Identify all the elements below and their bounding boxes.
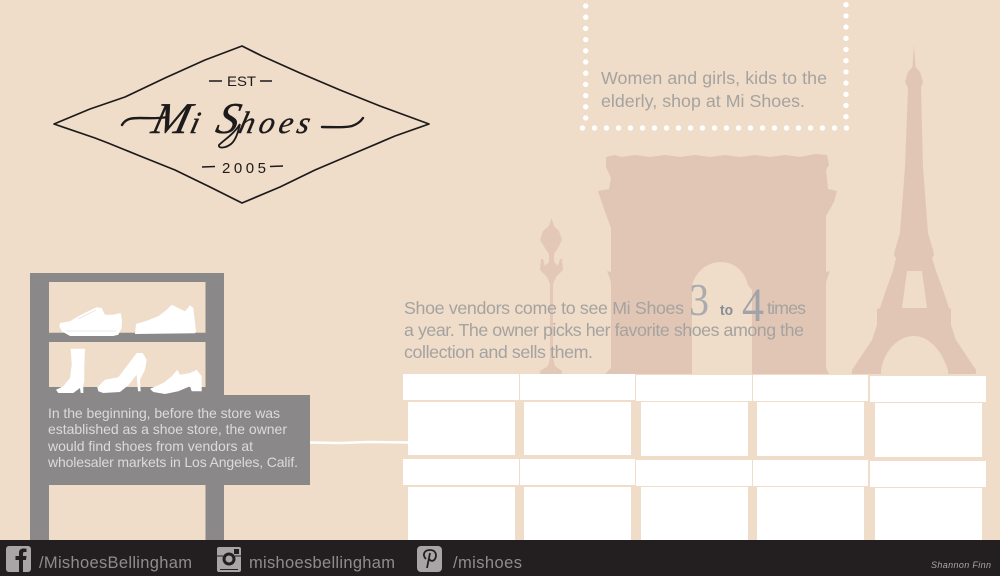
footer bar	[0, 540, 1000, 576]
big numbers: 3 to 4: 3	[689, 274, 709, 325]
silhouette: Eiffel Tower	[852, 45, 976, 374]
callout text: who shops: Women and girls, kids to the	[601, 68, 827, 88]
icon: pinterest	[417, 546, 442, 572]
credit: Shannon Finn	[931, 560, 991, 570]
silhouette: Arc de Triomphe	[598, 154, 837, 374]
icon: flat shoe	[135, 305, 196, 334]
callout text: who shops: elderly, shop at Mi Shoes.	[601, 91, 805, 111]
silhouette: street lamp	[540, 218, 563, 376]
text: shoe vendors: a year. The owner picks her favorite shoes among the	[404, 320, 804, 340]
big numbers: 3 to 4	[689, 274, 764, 332]
text: in the beginning: would find shoes from vendors at	[47, 438, 253, 454]
footer text: facebook: /MishoesBellingham	[39, 554, 192, 572]
big numbers: 3 to 4: to	[720, 302, 733, 319]
text: in the beginning: established as a shoe store, the owner	[48, 421, 287, 437]
footer text: pinterest: /mishoes	[453, 554, 522, 572]
icon: instagram	[217, 547, 241, 572]
footer text: instagram: mishoesbellingham	[249, 554, 395, 572]
logo: Mi Shoes diamond: EST	[227, 73, 256, 89]
text: in the beginning: In the beginning, before the store was	[48, 405, 280, 421]
big numbers: 3 to 4: 4	[742, 279, 764, 332]
callout text: who shops	[601, 68, 827, 111]
text: shoe vendors: times	[767, 298, 806, 318]
icon: low heel loafer	[150, 370, 202, 394]
shoe boxes	[403, 374, 986, 541]
logo: Mi Shoes diamond	[54, 46, 429, 203]
icon: facebook	[6, 546, 31, 572]
text: in the beginning	[47, 405, 298, 470]
text: shoe vendors	[404, 298, 806, 362]
logo: Mi Shoes diamond: 2005	[222, 160, 266, 177]
connector line	[310, 442, 408, 443]
text: shoe vendors: Shoe vendors come to see Mi Shoes	[404, 298, 684, 318]
shoe rack	[30, 273, 310, 540]
dotted callout frame	[582, 5, 847, 128]
text: in the beginning: wholesaler markets in Los Angeles, Calif.	[47, 454, 298, 470]
text: shoe vendors: collection and sells them.	[404, 342, 593, 362]
icon: sneaker	[59, 307, 122, 336]
icon: high heel	[97, 353, 147, 393]
icon: boot	[56, 349, 85, 393]
logo: Mi Shoes diamond: MiShoes	[147, 94, 322, 143]
